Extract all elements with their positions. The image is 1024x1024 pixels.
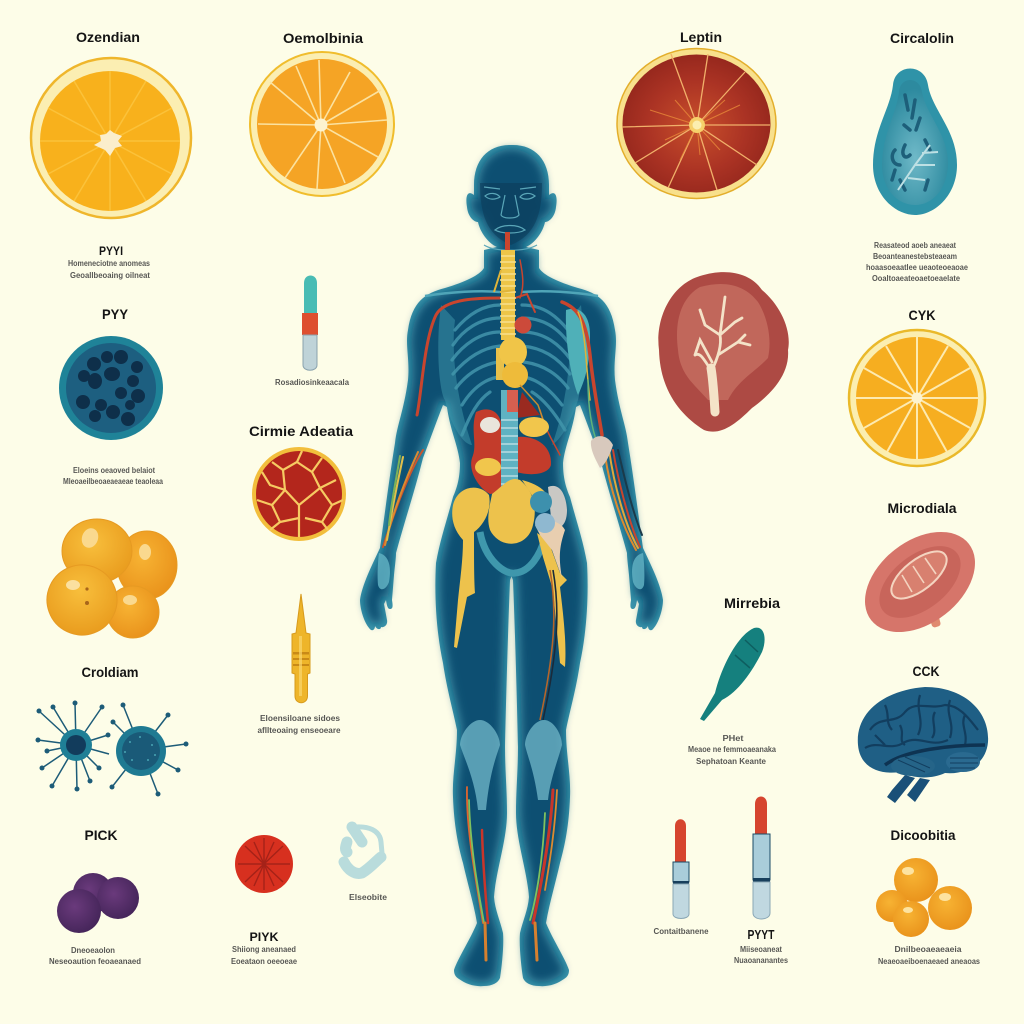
- text block: Dicoobitia description: Neaeoaeiboenaeaed aneaoas: [878, 957, 981, 966]
- yellow upper organs: [496, 337, 545, 425]
- label: PYYI: [68, 244, 150, 280]
- human body figure: [360, 145, 663, 986]
- cage sides: [438, 305, 583, 445]
- icon: blue brain: [858, 687, 988, 803]
- thigh vessels: [540, 570, 557, 720]
- icon: teal pill: [700, 628, 765, 721]
- heading: PICK: PICK: [84, 827, 118, 843]
- caption: capsule: Rosadiosinkeaacala: [275, 378, 350, 387]
- icon: meat-like organ with branching vessels: [658, 272, 789, 432]
- heading: Ozendian: Ozendian: [76, 29, 140, 45]
- heading: Mirrebia: Mirrebia: [724, 595, 780, 611]
- arteries: [417, 260, 602, 455]
- heading: Circalolin: Circalolin: [890, 30, 954, 46]
- label: PYYI: PYYI: [99, 244, 123, 258]
- leg vessels: [467, 787, 557, 960]
- elbow joint: [591, 436, 613, 468]
- text block: PICK description: Neseoaution feoaeanaed: [49, 957, 141, 966]
- forearm strands right: [605, 450, 642, 550]
- label: PIYK: Shiiong aneanaed: [232, 945, 296, 954]
- icon: neuron-like cells: [36, 700, 188, 796]
- text block: PYY description: [63, 466, 163, 486]
- icon: orange balls: [876, 858, 972, 937]
- text block: PHet description: [688, 734, 776, 766]
- icon: teal pear-shaped organ: [873, 68, 957, 215]
- label: PYYI: Geoallbeoaing oilneat: [70, 271, 150, 280]
- icon: purple spheres: [57, 873, 139, 933]
- text block: upper right description: Reasateod aoeb aneaeat: [874, 241, 956, 250]
- heading: Oemolbinia: Oemolbinia: [283, 30, 363, 46]
- yellow kidneys and white organ: [475, 417, 549, 476]
- clavicles: [425, 291, 598, 296]
- label: PYYT: Nuaoananantes: [734, 956, 788, 965]
- text block: PICK description: [49, 946, 141, 966]
- text block: needle description: Eloensiloane sidoes: [260, 714, 341, 723]
- icon: red fibrous slice: [617, 48, 776, 198]
- abdominal red organs: [471, 392, 551, 494]
- forearm strands left: [383, 450, 423, 547]
- text block: PICK description: Dneoeaolon: [71, 946, 115, 955]
- heading: Croldiam: Croldiam: [82, 664, 138, 680]
- text block: Dicoobitia description: [878, 945, 981, 966]
- text block: PYY description: Mleoaeilbeoaeaeaeae teaoleaa: [63, 477, 163, 486]
- label: PYYT: [734, 927, 788, 965]
- wrists and palms: [378, 553, 644, 589]
- icon: pale squiggle molecule: [344, 827, 382, 873]
- text block: PHet description: Sephatoan Keante: [696, 757, 767, 766]
- text block: PHet description: Meaoe ne femmoaeanaka: [688, 745, 776, 754]
- pelvis: grey, tan and blue organs: [530, 486, 567, 578]
- face: [484, 187, 537, 250]
- icon: orange citrus slice: [250, 52, 394, 196]
- icon: short capsule: [673, 819, 689, 918]
- heading: Dicoobitia: Dicoobitia: [890, 827, 956, 843]
- body silhouette: [360, 145, 663, 986]
- knees: [460, 720, 562, 810]
- label: PYYT: PYYT: [748, 927, 775, 942]
- text block: PYY description: Eloeins oeaoved belaiot: [73, 466, 155, 475]
- text block: upper right description: hoaasoeaatlee ueaoteoeaoae: [866, 263, 969, 272]
- text block: Dicoobitia description: Dnilbeoaeaeaeia: [894, 945, 962, 954]
- label: PIYK: [231, 930, 298, 966]
- label: PYYT: Miiseoaneat: [740, 945, 782, 954]
- heading: CCK: CCK: [912, 663, 940, 679]
- icon: orange citrus slice right: [849, 330, 985, 466]
- icon: dark teal cell with dots: [59, 336, 163, 440]
- icon: gold needle: [292, 594, 310, 703]
- heading: CYK: CYK: [908, 307, 936, 323]
- ribs: [452, 305, 571, 435]
- heading: Cirmie Adeatia: Cirmie Adeatia: [249, 423, 353, 439]
- icon: red veined disc: [252, 447, 346, 541]
- caption: short capsule: Contaitbanene: [654, 927, 709, 936]
- spine cervical and thoracic: [494, 232, 516, 340]
- blue intestinal column: [501, 390, 518, 494]
- text block: upper right description: [866, 241, 969, 283]
- icon: teal capsule: [302, 276, 318, 370]
- heading: Microdiala: Microdiala: [888, 500, 957, 516]
- text block: needle description: [258, 714, 341, 735]
- label: PYYI: Homeneciotne anomeas: [68, 259, 150, 268]
- icon: pink mitochondrion: [846, 512, 994, 652]
- icon: large yellow citrus slice: [31, 58, 191, 218]
- icon: red textured disc: [235, 835, 293, 893]
- heading: Leptin: Leptin: [680, 29, 722, 45]
- text block: upper right description: Ooaltoaeateoaetoeaelate: [872, 274, 961, 283]
- label: PIYK: Eoeataon oeeoeae: [231, 957, 298, 966]
- text block: PHet description: PHet: [722, 734, 744, 743]
- text block: upper right description: Beoanteanestebsteaeam: [873, 252, 957, 261]
- icon: yellow blob cluster: [35, 519, 177, 647]
- pelvic arc: [480, 532, 545, 573]
- heading: PYY: PYY: [102, 306, 129, 322]
- caption: squiggle: Elseobite: [349, 893, 388, 902]
- heart: [514, 316, 532, 334]
- icon: tall capsule: [753, 796, 770, 919]
- pelvis: yellow bones: [452, 479, 567, 667]
- text block: needle description: afllteoaing enseoeare: [258, 726, 341, 735]
- face shading: [480, 183, 542, 245]
- shoulder highlight: [566, 309, 590, 395]
- label: PIYK: PIYK: [250, 930, 279, 944]
